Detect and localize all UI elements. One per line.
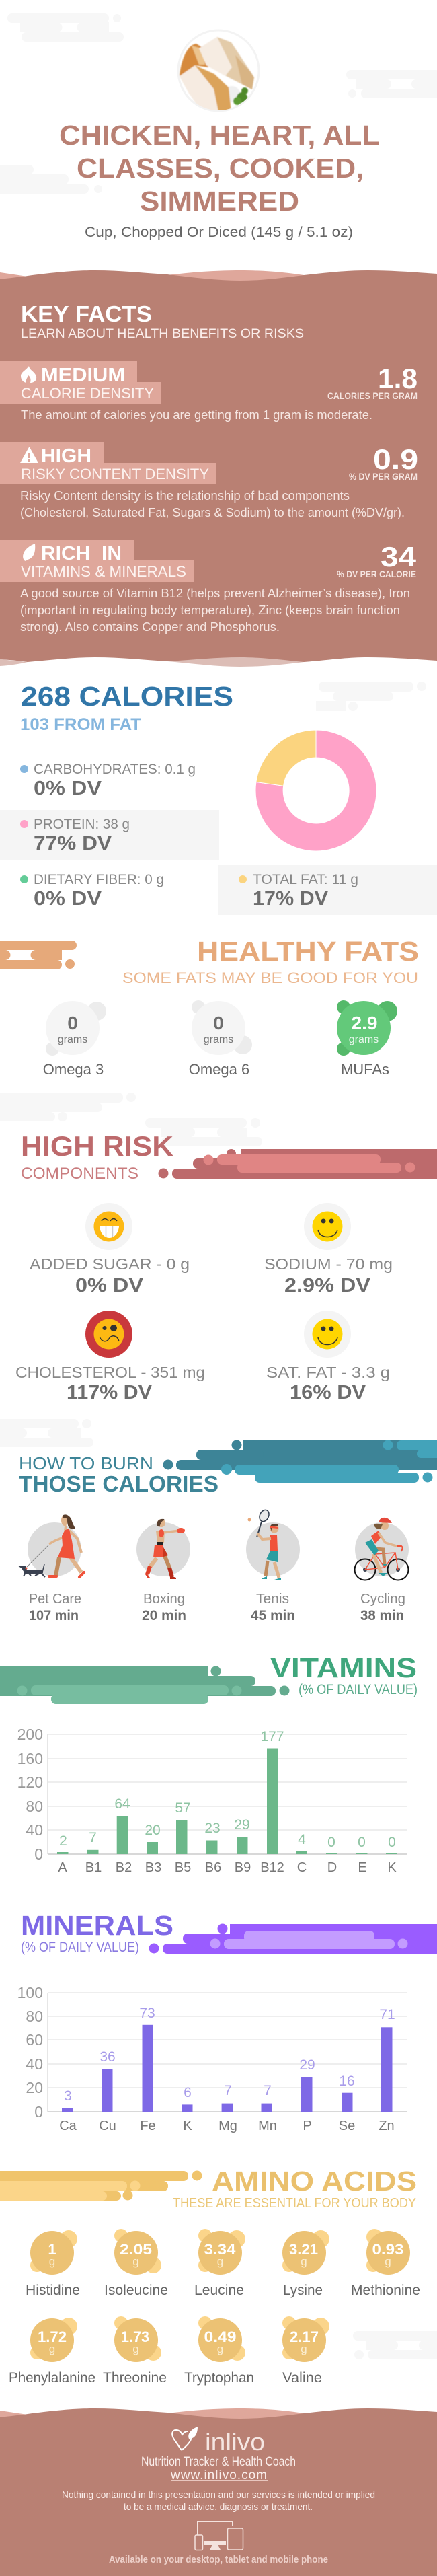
bar chart: minerals: 7 [264, 2083, 272, 2098]
bar chart: vitamins: 0 [388, 1835, 396, 1850]
icon: woman walking dog [17, 1514, 84, 1577]
stat: omega 3: 0 [67, 1013, 78, 1033]
icon: tennis player [247, 1508, 281, 1580]
macro: protein: PROTEIN: 38 g [34, 817, 130, 832]
risk: cholesterol: 117% DV [67, 1382, 153, 1403]
amino: threonine: 1.73 [121, 2328, 149, 2345]
subheading: components: COMPONENTS [21, 1165, 138, 1183]
amino: valine [282, 2316, 329, 2386]
bar chart: minerals: 20 [26, 2079, 43, 2096]
decorative banner: healthy fats [0, 941, 77, 969]
icon: leaf [23, 544, 35, 561]
bar chart: minerals: 7 [224, 2083, 232, 2098]
decorative banner: vitamins [0, 1666, 289, 1704]
disclaimer [62, 2489, 375, 2513]
risk: sodium [264, 1203, 393, 1296]
panel: high risk components [15, 1130, 437, 1403]
badge: rich in vitamins and minerals: VITAMINS & MINERALS [21, 563, 186, 580]
risk: saturated fat: 16% DV [290, 1382, 366, 1403]
website link: www.inlivo.com [170, 2468, 267, 2482]
bar chart: vitamins: 20 [145, 1823, 161, 1838]
amino: tryptophan: g [217, 2343, 223, 2355]
decorative banner: amino acids [0, 2170, 202, 2201]
badge: high risky content density: HIGH [41, 445, 91, 467]
bar chart: vitamins: 4 [298, 1832, 306, 1847]
amino: leucine: Leucine [194, 2283, 244, 2298]
decorative banner: minerals [149, 1924, 437, 1954]
panel: calories [0, 681, 437, 915]
heading: how to burn: HOW TO BURN [19, 1453, 153, 1473]
bar chart: minerals: Mn [258, 2119, 277, 2133]
amino: isoleucine: g [132, 2255, 139, 2268]
heading: calories: 268 CALORIES [21, 681, 233, 712]
risk: added sugar [30, 1203, 190, 1296]
bar chart: vitamins: 177 [260, 1729, 284, 1744]
macro: carbohydrates [20, 762, 196, 799]
bar chart: vitamins: 23 [204, 1820, 221, 1836]
activity: tennis: 45 min [251, 1608, 295, 1623]
subheading: healthy fats: SOME FATS MAY BE GOOD FOR YOU [122, 969, 418, 986]
bar chart: minerals: 29 [299, 2057, 315, 2073]
activity: pet care [17, 1514, 84, 1623]
availability note: Available on your desktop, tablet and mobile phone [109, 2554, 328, 2565]
panel: amino acids [0, 2166, 420, 2386]
heading: amino acids: AMINO ACIDS [212, 2166, 417, 2197]
activity: tennis: Tenis [256, 1592, 289, 1607]
risk: cholesterol [15, 1311, 205, 1403]
macro: carbohydrates: CARBOHYDRATES: 0.1 g [34, 762, 196, 777]
bar chart: vitamins: 0 [34, 1845, 43, 1863]
risk: saturated fat: SAT. FAT - 3.3 g [266, 1364, 390, 1381]
title: CLASSES, COOKED, [77, 153, 364, 184]
amino: valine: g [301, 2343, 307, 2355]
tagline: Nutrition Tracker & Health Coach [141, 2455, 296, 2469]
amino: threonine [103, 2316, 167, 2386]
bar chart: vitamins: 80 [26, 1798, 43, 1815]
amino: lysine: g [301, 2255, 307, 2268]
bar chart: vitamins: 7 [89, 1830, 97, 1845]
text: vitamins and minerals description: A good source of Vitamin B12 (helps prevent Alzheimer’s disease), Iron [20, 587, 410, 600]
heading: key facts: KEY FACTS [21, 301, 152, 326]
amino: methionine: g [385, 2255, 391, 2268]
amino: leucine [194, 2229, 245, 2298]
bar chart: vitamins: B12 [260, 1860, 284, 1875]
bar chart: minerals: K [183, 2119, 192, 2133]
amino: lysine: Lysine [283, 2283, 323, 2298]
amino: isoleucine [104, 2229, 168, 2298]
heading: minerals: MINERALS [21, 1910, 173, 1941]
amino: threonine: g [132, 2343, 139, 2355]
macro: total fat [218, 865, 437, 915]
bar chart: vitamins: B2 [116, 1860, 132, 1875]
bar chart: minerals: Mg [218, 2119, 237, 2133]
activity: pet care: Pet Care [29, 1592, 81, 1607]
bar chart: minerals: 16 [339, 2073, 355, 2089]
panel: key facts [0, 270, 437, 667]
icon: grinning face [94, 1211, 124, 1242]
amino: methionine: Methionine [351, 2283, 420, 2298]
bar chart: vitamins: K [387, 1860, 397, 1875]
stat: omega 6 [189, 1000, 252, 1078]
bar chart: vitamins: 200 [17, 1726, 43, 1743]
heading: healthy fats: HEALTHY FATS [197, 936, 419, 967]
bar chart: minerals: 73 [139, 2005, 155, 2021]
subheading: vitamins: (% OF DAILY VALUE) [299, 1682, 418, 1697]
amino: leucine: g [217, 2255, 223, 2268]
badge: high risky content density [0, 442, 216, 484]
activity: boxing: 20 min [142, 1608, 186, 1623]
amino: histidine: Histidine [26, 2283, 80, 2298]
amino: lysine: 3.21 [289, 2241, 318, 2258]
stat: calories per gram: 1.8 [378, 363, 418, 394]
subheading: amino acids: THESE ARE ESSENTIAL FOR YOUR BODY [173, 2196, 416, 2211]
bar chart: vitamins: 29 [234, 1817, 250, 1833]
food photo [178, 30, 259, 112]
amino: leucine: 3.34 [204, 2241, 236, 2258]
text: vitamins and minerals description: (important in regulating body temperature), Zinc (keeps brain function [20, 603, 400, 617]
subheading: minerals: (% OF DAILY VALUE) [21, 1940, 139, 1955]
bar chart: vitamins: B5 [175, 1860, 191, 1875]
macro: dietary fiber: DIETARY FIBER: 0 g [34, 872, 164, 887]
text: risky content description: (Cholesterol, Saturated Fat, Sugars & Sodium) to the amount (%DV/gr). [20, 506, 405, 519]
bar chart: vitamins: B9 [235, 1860, 251, 1875]
amino: isoleucine: 2.05 [120, 2241, 152, 2258]
stat: calories per gram: CALORIES PER GRAM [327, 390, 418, 401]
donut chart [255, 730, 376, 851]
amino: methionine: 0.93 [372, 2241, 403, 2258]
amino: phenylalanine: Phenylalanine [9, 2370, 95, 2386]
logo: inlivo [172, 2427, 265, 2456]
activity: pet care: 107 min [29, 1608, 79, 1623]
bar chart: minerals: 80 [26, 2008, 43, 2025]
activity: boxing: Boxing [143, 1592, 185, 1607]
title: CHICKEN, HEART, ALL [59, 120, 380, 151]
bar chart: vitamins: C [297, 1860, 307, 1875]
icon: flame [21, 366, 36, 383]
bar chart: vitamins: A [58, 1860, 67, 1875]
bar chart: minerals: 36 [100, 2049, 116, 2065]
macro: total fat: TOTAL FAT: 11 g [253, 872, 358, 887]
risk: sodium: 2.9% DV [284, 1275, 371, 1296]
amino: tryptophan: Tryptophan [184, 2370, 254, 2386]
disclaimer: to be a medical advice, diagnosis or treatment. [124, 2501, 313, 2513]
bar chart: minerals: 6 [184, 2085, 192, 2100]
amino: lysine [282, 2230, 329, 2298]
icon: smiling face [312, 1319, 343, 1350]
bar chart: minerals: 71 [379, 2007, 395, 2022]
amino: methionine [351, 2229, 420, 2298]
amino: histidine: g [49, 2255, 55, 2268]
stat: omega 3: Omega 3 [43, 1061, 104, 1078]
bar chart: minerals: 60 [26, 2031, 43, 2049]
panel: minerals [17, 1910, 437, 2133]
macro: dietary fiber: 0% DV [34, 888, 102, 910]
text: vitamins and minerals description: strong). Also contains Copper and Phosphorus. [20, 620, 280, 634]
bar chart: minerals: Zn [379, 2119, 395, 2133]
amino: threonine: Threonine [103, 2370, 167, 2386]
stat: dv per gram [349, 443, 418, 482]
serving size subtitle: Cup, Chopped Or Diced (145 g / 5.1 oz) [85, 225, 353, 240]
activity: cycling [355, 1518, 409, 1623]
icon: worried face [94, 1319, 124, 1350]
panel: footer [0, 2408, 437, 2576]
stat: mufas: MUFAs [341, 1061, 389, 1078]
bar chart: vitamins: 0 [358, 1835, 366, 1850]
stat: dv per gram: 0.9 [373, 443, 418, 475]
amino: valine: 2.17 [290, 2328, 319, 2345]
badge: high risky content density: RISKY CONTENT DENSITY [21, 466, 209, 482]
amino: tryptophan: 0.49 [204, 2328, 237, 2345]
amino: phenylalanine [9, 2318, 95, 2386]
bar chart: minerals: P [303, 2119, 312, 2133]
panel: healthy fats [0, 936, 419, 1078]
bar chart: minerals: Se [339, 2119, 355, 2133]
badge: medium calorie density [0, 361, 161, 404]
macro: protein [0, 810, 219, 860]
icon: smiling face [312, 1211, 343, 1242]
text: risky content description [20, 489, 405, 519]
decorative banner: high risk [159, 1149, 437, 1179]
heading: vitamins: VITAMINS [270, 1652, 417, 1683]
bar chart: vitamins: 40 [26, 1821, 43, 1839]
stat: omega 6: grams [204, 1034, 233, 1045]
bar chart: vitamins: 120 [17, 1773, 43, 1791]
bar chart: vitamins [17, 1726, 407, 1875]
stat: omega 3 [43, 1001, 106, 1078]
text: vitamins and minerals description [20, 587, 410, 634]
logo: inlivo: inlivo [205, 2428, 265, 2456]
macro: carbohydrates: 0% DV [34, 778, 102, 799]
stat: dv per gram: % DV PER GRAM [349, 471, 418, 482]
activity: cycling: 38 min [360, 1608, 404, 1623]
bar chart: vitamins: 2 [59, 1833, 67, 1849]
icon: devices [195, 2522, 243, 2550]
bar chart: vitamins: E [358, 1860, 367, 1875]
bar chart: vitamins: D [327, 1860, 337, 1875]
risk: cholesterol: CHOLESTEROL - 351 mg [15, 1364, 205, 1381]
badge: rich in vitamins and minerals: RICH IN [41, 543, 122, 564]
stat: calories per gram [327, 363, 418, 401]
stat: dv per calorie [337, 541, 417, 579]
amino: tryptophan [184, 2316, 254, 2386]
subheading: key facts: LEARN ABOUT HEALTH BENEFITS OR RISKS [21, 327, 304, 341]
stat: omega 3: grams [58, 1034, 87, 1045]
amino: isoleucine: Isoleucine [104, 2283, 168, 2298]
subheading: calories from fat: 103 FROM FAT [20, 715, 141, 734]
bar chart: minerals: 100 [17, 1984, 43, 2001]
heading: high risk: HIGH RISK [21, 1130, 173, 1162]
title: SIMMERED [140, 186, 299, 217]
activity: cycling: Cycling [360, 1592, 405, 1607]
stat: mufas: grams [349, 1034, 379, 1045]
heading: those calories: THOSE CALORIES [19, 1471, 218, 1496]
risk: added sugar: 0% DV [75, 1275, 144, 1296]
stat: dv per calorie: 34 [381, 541, 417, 573]
text: risky content description: Risky Content density is the relationship of bad components [20, 489, 350, 503]
stat: omega 6: Omega 6 [189, 1061, 249, 1078]
bar chart: vitamins: B1 [85, 1860, 102, 1875]
risk: sodium: SODIUM - 70 mg [264, 1255, 393, 1273]
bar chart: minerals [17, 1984, 407, 2133]
activity: tennis [246, 1508, 300, 1623]
icon: warning triangle [20, 447, 38, 463]
amino: phenylalanine: g [49, 2343, 55, 2355]
bar chart: vitamins: B6 [205, 1860, 221, 1875]
amino: valine: Valine [282, 2370, 322, 2386]
amino: histidine [26, 2230, 80, 2298]
disclaimer: Nothing contained in this presentation and our services is intended or implied [62, 2489, 375, 2501]
stat: omega 6: 0 [213, 1013, 224, 1033]
icon: cyclist [355, 1518, 409, 1580]
bar chart: minerals: Ca [59, 2119, 77, 2133]
panel: how to burn calories [17, 1440, 437, 1623]
stat: mufas: 2.9 [352, 1013, 377, 1033]
macro: dietary fiber [20, 872, 164, 910]
bar chart: minerals: 40 [26, 2055, 43, 2073]
stat: dv per calorie: % DV PER CALORIE [337, 568, 416, 579]
decorative banner: burn calories [163, 1440, 437, 1483]
icon: boxer [145, 1519, 185, 1579]
amino: histidine: 1 [48, 2241, 56, 2258]
badge: rich in vitamins and minerals [0, 540, 194, 582]
risk: added sugar: ADDED SUGAR - 0 g [30, 1255, 190, 1273]
badge: medium calorie density: MEDIUM [41, 365, 125, 386]
bar chart: vitamins: B3 [145, 1860, 161, 1875]
bar chart: minerals: 3 [64, 2088, 72, 2104]
bar chart: vitamins: 0 [327, 1835, 335, 1850]
activity: boxing [136, 1519, 190, 1623]
bar chart: vitamins: 57 [175, 1800, 191, 1816]
bar chart: minerals: Fe [140, 2119, 156, 2133]
bar chart: minerals: Cu [99, 2119, 116, 2133]
macro: protein: 77% DV [34, 833, 112, 854]
amino: phenylalanine: 1.72 [38, 2328, 67, 2345]
risk: saturated fat [266, 1311, 390, 1403]
title [59, 120, 380, 217]
stat: mufas [337, 1000, 397, 1078]
badge: medium calorie density: CALORIE DENSITY [21, 385, 154, 402]
text: calorie density description: The amount of calories you are getting from 1 gram is moderate. [21, 408, 372, 422]
macro: total fat: 17% DV [253, 888, 329, 910]
bar chart: vitamins: 64 [114, 1796, 130, 1812]
bar chart: vitamins: 160 [17, 1750, 43, 1767]
panel: vitamins [0, 1652, 418, 1875]
bar chart: minerals: 0 [34, 2103, 43, 2121]
